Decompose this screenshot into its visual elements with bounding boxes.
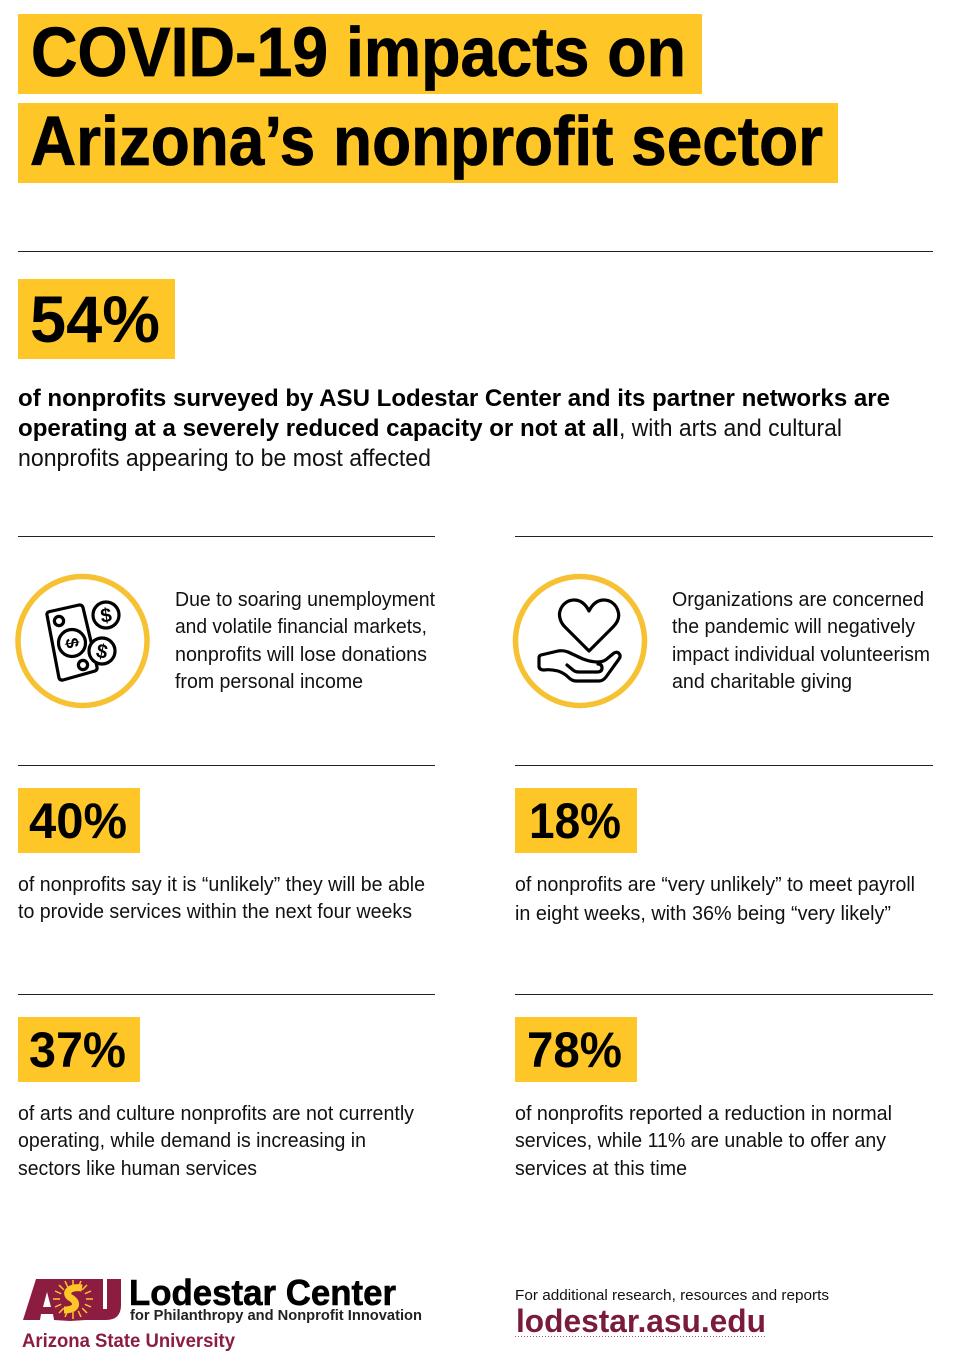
- text: 37% description: sectors like human services: [18, 1157, 257, 1180]
- text: volunteerism: the pandemic will negatively: [672, 615, 916, 638]
- main statistic description: nonprofits appearing to be most affected: [18, 445, 431, 472]
- text: 18% description: [515, 873, 915, 925]
- icon: money and coins: $: [61, 636, 83, 650]
- text: 37% description: operating, while demand is increasing in: [18, 1129, 366, 1152]
- text: donations: Due to soaring unemployment: [175, 588, 435, 611]
- statistic: 40%: 40%: [29, 793, 127, 849]
- text: donations: and volatile financial markets,: [175, 615, 427, 638]
- icon: money and coins: $: [94, 640, 110, 664]
- main statistic description: of nonprofits surveyed by ASU Lodestar Center and its partner networks are: [18, 385, 890, 412]
- icon: heart in hand: [516, 576, 644, 706]
- text: 78% description: services at this time: [515, 1157, 687, 1180]
- logo mark: ASU block with sunburst: [23, 1279, 121, 1321]
- text: 78% description: of nonprofits reported a reduction in normal: [515, 1102, 892, 1125]
- text: 37% description: of arts and culture nonprofits are not currently: [18, 1102, 415, 1125]
- main statistic: 54%: 54%: [30, 282, 160, 356]
- main statistic description: , with arts and cultural: [619, 415, 842, 442]
- logo: ASU Lodestar Center: for Philanthropy and Nonprofit Innovation: [130, 1308, 422, 1324]
- icon: money and coins: $: [99, 604, 113, 628]
- text: 37% description: [18, 1102, 415, 1180]
- footer text: For additional research, resources and reports: [515, 1287, 829, 1304]
- main statistic description: operating at a severely reduced capacity or not at all: [18, 415, 619, 442]
- title: [18, 13, 838, 183]
- text: volunteerism: and charitable giving: [672, 670, 852, 693]
- logo: ASU Lodestar Center: Arizona State University: [22, 1331, 235, 1352]
- text: 40% description: of nonprofits say it is “unlikely” they will be able: [18, 873, 425, 896]
- statistic: 37%: 37%: [29, 1022, 126, 1078]
- title: Arizona’s nonprofit sector: [30, 102, 823, 180]
- text: donations: [175, 588, 435, 693]
- text: volunteerism: impact individual volunteerism: [672, 643, 930, 666]
- text: 78% description: [515, 1102, 892, 1180]
- text: volunteerism: [672, 588, 930, 693]
- logo: ASU Lodestar Center: Lodestar Center: [129, 1272, 396, 1313]
- logo: ASU Lodestar Center: [22, 1272, 422, 1352]
- statistic: 78%: 78%: [527, 1022, 622, 1078]
- text: volunteerism: Organizations are concerned: [672, 588, 924, 611]
- main statistic description: [18, 385, 890, 472]
- text: 78% description: services, while 11% are unable to offer any: [515, 1129, 887, 1152]
- title: COVID-19 impacts on: [31, 13, 686, 91]
- text: 18% description: in eight weeks, with 36% being “very likely”: [515, 902, 891, 925]
- text: 40% description: to provide services within the next four weeks: [18, 900, 412, 923]
- text: donations: nonprofits will lose donations: [175, 643, 427, 666]
- icon: money and coins: [18, 576, 147, 706]
- text: 40% description: [18, 873, 425, 923]
- statistic: 18%: 18%: [529, 793, 621, 849]
- footer link: lodestar.asu.edu: [516, 1303, 766, 1339]
- text: 18% description: of nonprofits are “very unlikely” to meet payroll: [515, 873, 915, 896]
- text: donations: from personal income: [175, 670, 363, 693]
